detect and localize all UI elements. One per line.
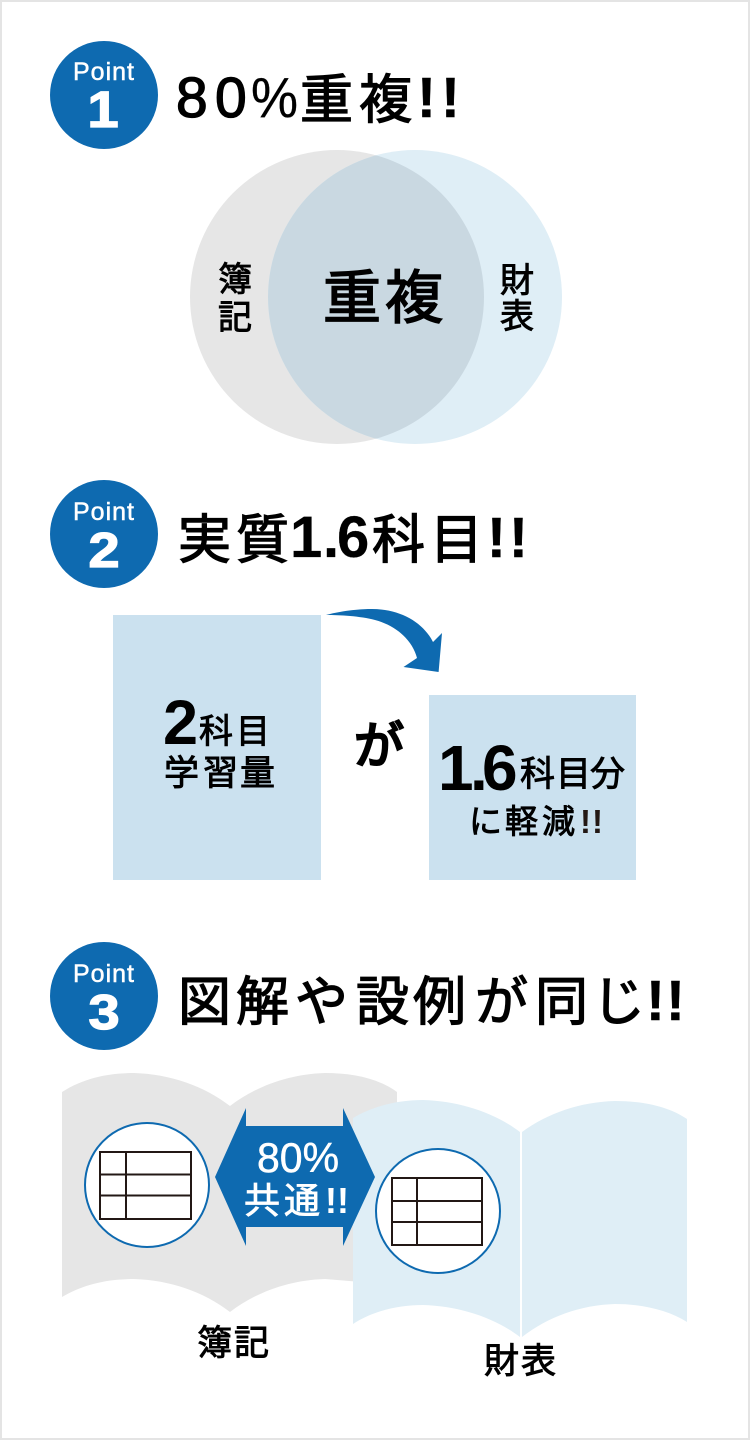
text: ga: が bbox=[354, 718, 404, 774]
venn label: bookkeeping: 記 bbox=[218, 299, 252, 337]
badge: Point 2: 2 bbox=[88, 523, 120, 578]
venn label: financial statements: 表 bbox=[500, 298, 534, 336]
panel: 2 subjects of study: 2 bbox=[163, 688, 198, 758]
heading: effectively 1.6 subjects: !! bbox=[487, 506, 528, 570]
panel: reduced to 1.6 subjects: !! bbox=[580, 803, 603, 840]
panel: 2 subjects of study: 科目 bbox=[199, 713, 270, 751]
heading: effectively 1.6 subjects: 科目 bbox=[372, 511, 483, 570]
icon: table in circle, left bbox=[85, 1123, 209, 1247]
heading: 80% overlap bbox=[176, 66, 460, 130]
badge: Point 3: Point bbox=[73, 960, 134, 988]
label: bookkeeping: 簿記 bbox=[197, 1324, 269, 1363]
badge: Point 1 bbox=[50, 41, 158, 149]
badge: Point 1: Point bbox=[73, 58, 134, 86]
badge: Point 1: 1 bbox=[87, 81, 119, 138]
panel: reduced to 1.6 subjects: に軽減 bbox=[469, 803, 575, 840]
book: bookkeeping bbox=[62, 1073, 397, 1312]
panel: 2 subjects of study: 学習量 bbox=[164, 754, 275, 793]
heading: effectively 1.6 subjects: 実質 bbox=[178, 511, 289, 570]
panel: 2 subjects of study bbox=[113, 615, 321, 880]
badge: Point 2: Point bbox=[73, 498, 134, 526]
heading: effectively 1.6 subjects bbox=[178, 505, 528, 570]
heading: 80% overlap: 80 bbox=[176, 66, 247, 130]
badge: Point 3: 3 bbox=[88, 985, 120, 1040]
double arrow: 80% in common: 80% bbox=[257, 1134, 339, 1181]
venn label: overlap: 重複 bbox=[323, 266, 443, 331]
badge: Point 2 bbox=[50, 480, 158, 588]
double arrow: 80% in common: !! bbox=[325, 1180, 349, 1221]
venn label: financial statements bbox=[500, 262, 534, 336]
double arrow: 80% in common: 共通 bbox=[244, 1180, 320, 1221]
badge: Point 3 bbox=[50, 942, 158, 1050]
venn label: bookkeeping bbox=[218, 261, 252, 337]
heading: 80% overlap: 重複 bbox=[300, 71, 412, 130]
heading: same diagrams and examples: 図解や設例が同じ bbox=[178, 973, 645, 1032]
panel: reduced to 1.6 subjects: 1.6 bbox=[438, 732, 518, 804]
panel: reduced to 1.6 subjects: 科目分 bbox=[520, 755, 625, 794]
venn label: bookkeeping: 簿 bbox=[218, 261, 252, 299]
panel: reduced to 1.6 subjects bbox=[429, 695, 636, 880]
book: financial statements bbox=[353, 1100, 687, 1337]
heading: same diagrams and examples: !! bbox=[646, 969, 685, 1033]
heading: effectively 1.6 subjects: 1.6 bbox=[290, 505, 369, 570]
arrow: curved down bbox=[326, 609, 442, 672]
heading: 80% overlap: % bbox=[251, 66, 298, 130]
icon: table in circle, right bbox=[376, 1149, 500, 1273]
heading: 80% overlap: !! bbox=[417, 66, 460, 130]
venn diagram bbox=[190, 150, 562, 444]
venn label: financial statements: 財 bbox=[500, 262, 534, 300]
label: financial statements: 財表 bbox=[484, 1342, 556, 1381]
double arrow: 80% in common bbox=[215, 1108, 375, 1246]
